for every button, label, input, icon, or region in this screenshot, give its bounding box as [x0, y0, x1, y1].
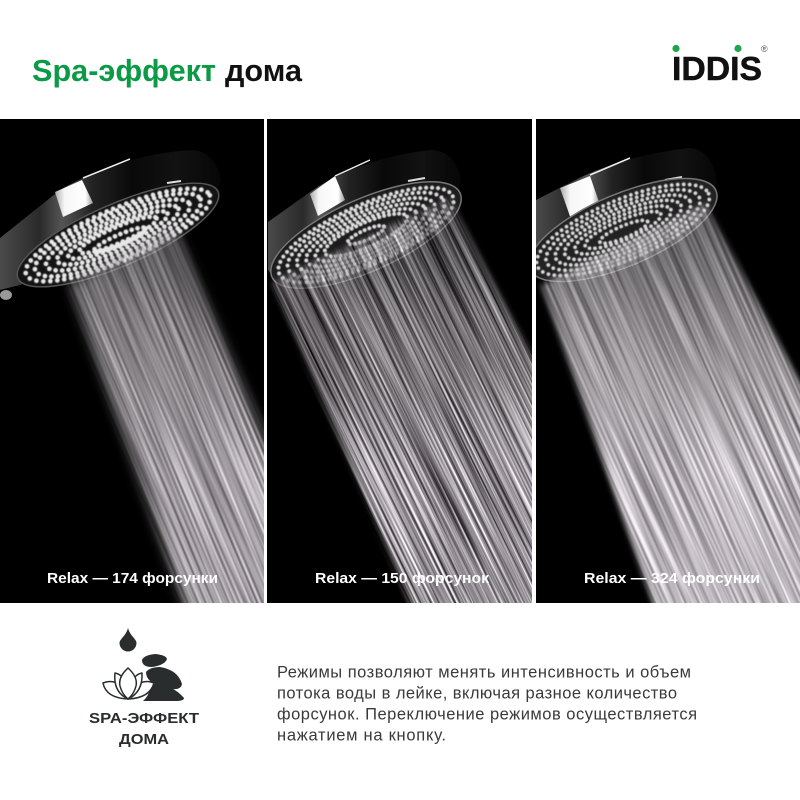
icon caption: ДОМА [119, 731, 169, 748]
water stream 1 [64, 226, 264, 603]
logo: IDDIS: IDDIS [672, 50, 762, 87]
icon: lotus [103, 668, 154, 699]
description text: форсунок. Переключение режимов осуществляется [277, 706, 697, 724]
description text: Режимы позволяют менять интенсивность и объем [277, 664, 691, 682]
icon caption: SPA-ЭФФЕКТ [89, 710, 199, 727]
panel: shower 174 nozzles [0, 119, 264, 603]
description text: нажатием на кнопку. [277, 726, 446, 744]
logo: IDDIS: ® [761, 44, 768, 54]
panel: shower 324 nozzles [536, 119, 800, 603]
panel: shower 150 nozzles [267, 119, 532, 603]
description text [277, 664, 697, 744]
icon caption [89, 710, 199, 748]
water stream 3 [538, 201, 800, 603]
title [32, 53, 303, 88]
icon: water drop [120, 628, 136, 652]
title: дома [225, 53, 303, 88]
shower head 3 [536, 148, 718, 282]
label 150: Relax — 150 форсунок [315, 571, 490, 587]
title: Spa-эффект [32, 53, 216, 88]
description text: потока воды в лейке, включая разное количество [277, 684, 677, 702]
water stream 2 [269, 196, 532, 603]
label 174: Relax — 174 форсунки [47, 571, 218, 587]
shower head 1 [0, 150, 230, 307]
icon: stones [142, 654, 184, 701]
icon: spa droplet, stones and lotus [103, 628, 184, 701]
shower head 2 [268, 150, 462, 289]
label 324: Relax — 324 форсунки [584, 571, 760, 587]
